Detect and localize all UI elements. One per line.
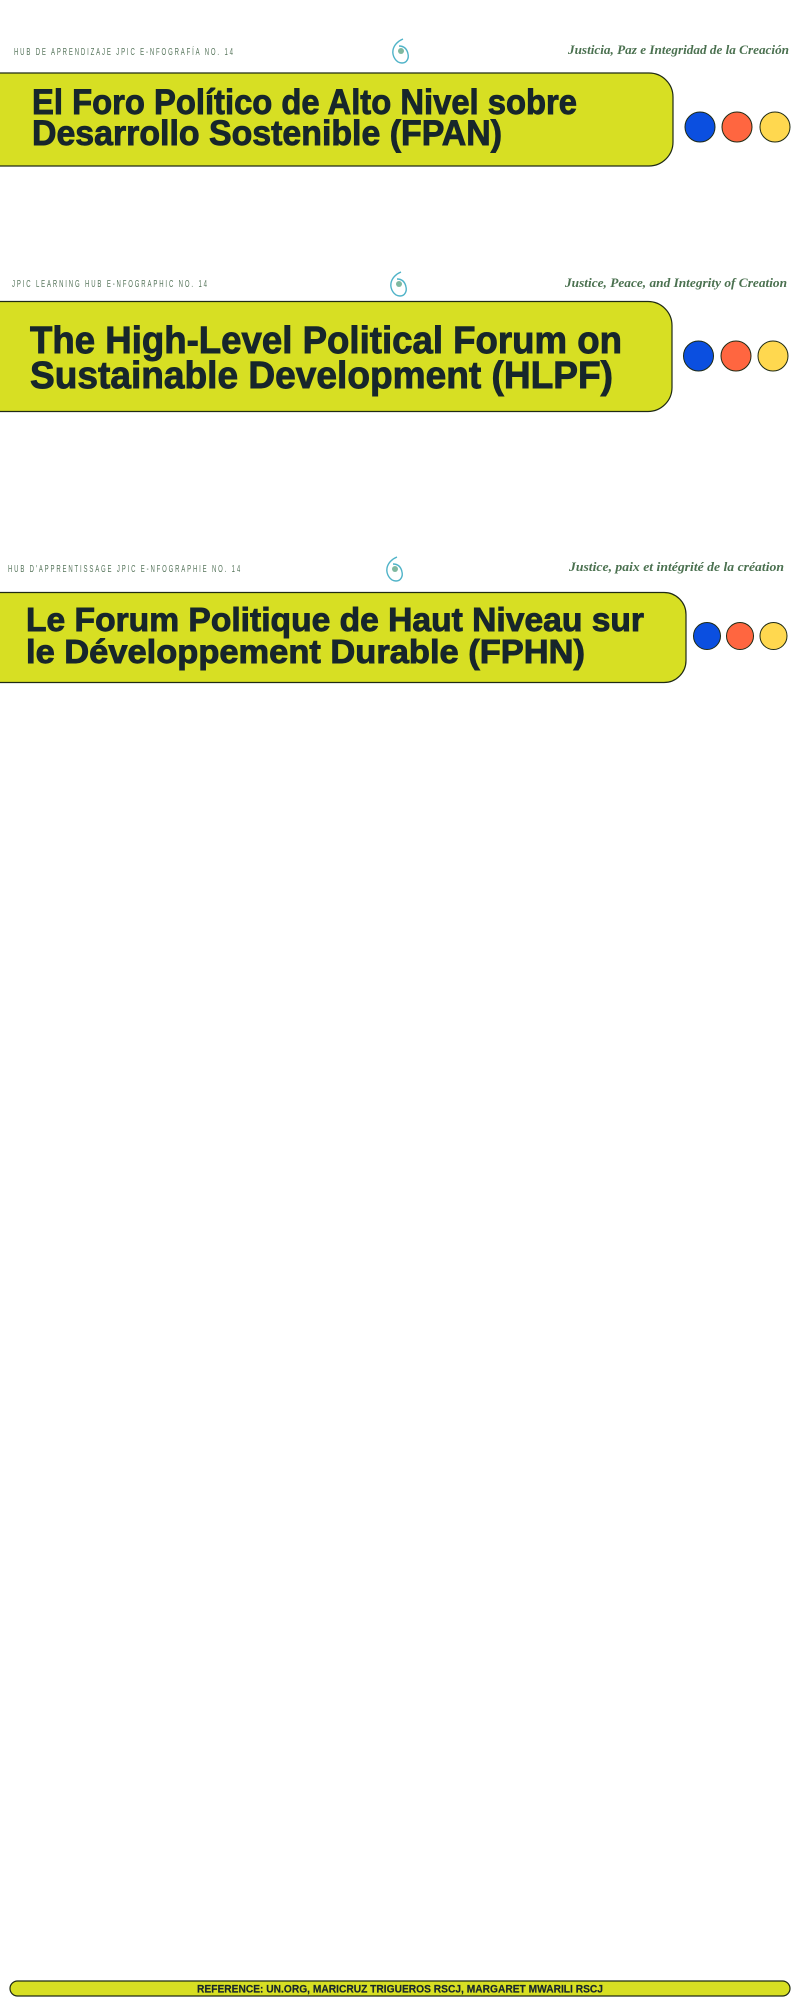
icon: logo — [393, 39, 408, 63]
section: English — [0, 272, 788, 412]
title panel — [0, 592, 686, 682]
footer: references — [10, 1981, 790, 1996]
colour dots — [685, 112, 790, 142]
icon: logo — [387, 557, 402, 581]
title panel — [0, 73, 673, 166]
title text: Sustainable Development (HLPF) — [30, 355, 613, 397]
title text: El Foro Político de Alto Nivel sobre — [32, 83, 577, 122]
header tagline: Justice, paix et intégrité de la création — [568, 559, 784, 574]
title text — [32, 83, 577, 153]
title text: Le Forum Politique de Haut Niveau sur — [26, 601, 644, 638]
header tagline: Justice, Peace, and Integrity of Creation — [564, 275, 787, 290]
section: French — [0, 557, 787, 682]
header label: hub name: HUB DE APRENDIZAJE JPIC E-NFOGRAFÍA NO. 14 — [14, 45, 233, 57]
title panel — [0, 302, 672, 412]
title text — [30, 320, 622, 397]
icon: logo — [391, 272, 406, 296]
title text — [26, 601, 644, 670]
section: Spanish — [0, 39, 790, 166]
header label: hub name: HUB D'APPRENTISSAGE JPIC E-NFOGRAPHIE NO. 14 — [8, 564, 240, 574]
header label: hub name: JPIC LEARNING HUB E-NFOGRAPHIC NO. 14 — [12, 279, 207, 289]
colour dots — [684, 341, 788, 371]
colour dots — [694, 622, 787, 650]
title text: The High-Level Political Forum on — [30, 320, 622, 362]
footer text: REFERENCE: UN.ORG, MARICRUZ TRIGUEROS RSCJ, MARGARET MWARILI RSCJ — [197, 1984, 603, 1996]
header tagline: Justicia, Paz e Integridad de la Creación — [567, 42, 789, 57]
title text: Desarrollo Sostenible (FPAN) — [32, 114, 502, 153]
title text: le Développement Durable (FPHN) — [26, 633, 585, 670]
